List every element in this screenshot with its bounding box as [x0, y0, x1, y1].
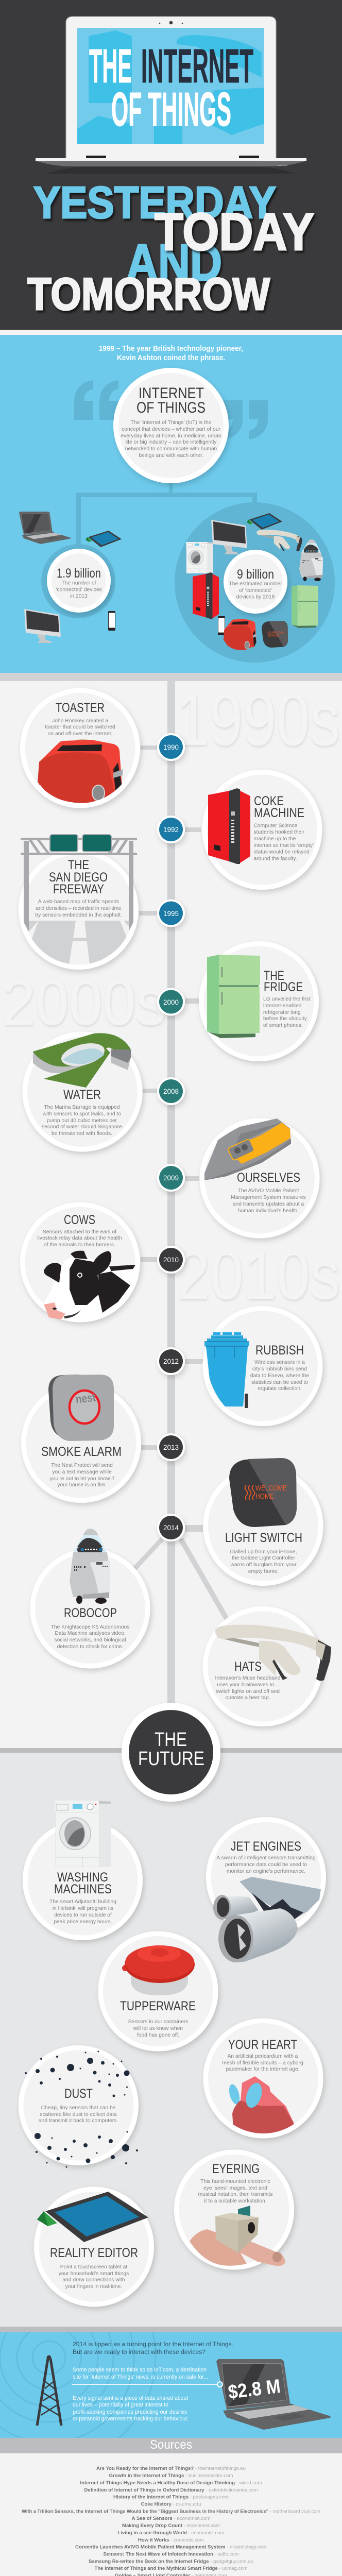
title: the internet of things [89, 39, 253, 136]
item: fridge: internet-enabled [263, 1003, 302, 1009]
panel: header [0, 0, 342, 330]
item: ourselves: human individual’s health. [238, 1208, 299, 1214]
item: eyering: EYERING [212, 2162, 260, 2176]
heading: yesterday today and tomorrow: TOMORROW [27, 268, 270, 319]
year: 2014: 2014 [163, 1524, 179, 1532]
icon: vending machine [193, 572, 219, 619]
source list: The Internet of Things and the Mythical Smart Fridge - uxmag.com [95, 2566, 248, 2571]
item: smoke alarm: The Nest Protect will send [51, 1463, 113, 1468]
icon: monitor small [24, 609, 61, 643]
decade label: 2000s: 2000s [2, 967, 166, 1039]
icon: headband [256, 530, 302, 551]
heading: the future: FUTURE [138, 1748, 204, 1770]
icon: marina barrage [33, 1033, 131, 1088]
item: smoke alarm: your house is on fire. [57, 1482, 107, 1488]
item: fridge: refrigerator long [263, 1010, 301, 1015]
item: eyering: musical notation, then transmits [198, 2192, 272, 2197]
icon: nest alarm: nest [75, 1391, 96, 1406]
item: eyering [174, 2149, 294, 2270]
text: for sale [73, 2367, 208, 2380]
item: smoke alarm: SMOKE ALARM [41, 1445, 122, 1459]
item: rubbish: Wireless sensors in a [254, 1360, 305, 1365]
definition circle: everyday lives at home, in medicine, urban [121, 433, 221, 439]
source list: Samsung Re-writes the Book on the Internet Fridge - gadgetguy.com.au [89, 2558, 253, 2564]
icon: heart [229, 2076, 294, 2133]
year: 1992: 1992 [163, 826, 179, 834]
item: hats [203, 1606, 331, 1726]
heading: the future [122, 1703, 220, 1802]
year: 1992 [157, 816, 185, 843]
source list: History of the Internet of Things - postscapes.com [113, 2495, 229, 2500]
item: dust: DUST [64, 2087, 93, 2101]
item: reality editor: and draw connections with [62, 2277, 125, 2283]
stat: 9 billion: The estimated number [229, 581, 282, 587]
item: tupperware [98, 1931, 218, 2052]
title: the internet of things: THE [89, 39, 132, 93]
stat: 9 billion: 9 billion [237, 567, 274, 582]
item: ourselves: OURSELVES [237, 1171, 300, 1185]
item: reality editor [34, 2187, 154, 2307]
item: washing machines: MACHINES [54, 1883, 112, 1896]
item: your heart: mesh of flexible circuits – a cyborg [222, 2060, 303, 2066]
item: dust [19, 2045, 139, 2168]
heading: yesterday today and tomorrow: YESTERDAY [33, 178, 276, 228]
item: san diego freeway: THE [68, 858, 89, 872]
item: ourselves [185, 1118, 319, 1239]
item: toaster: toaster that could be switched [45, 724, 115, 730]
icon: phone [218, 616, 225, 635]
stat: 9 billion [224, 550, 287, 614]
heading: sources: Sources [150, 2438, 192, 2452]
icon: vending machine [208, 788, 250, 864]
source list [22, 2466, 320, 2576]
panel: what is the internet of things [0, 330, 342, 673]
item: san diego freeway [19, 835, 157, 970]
icon: light switch [262, 621, 288, 648]
item: coke machine: internet so that its ‘empty’ [253, 843, 314, 849]
year: 1995: 1995 [163, 910, 179, 918]
item: eyering: eye ‘sees’ images, text and [203, 2185, 267, 2191]
intro text: Kevin Ashton coined the phrase. [117, 353, 225, 362]
definition circle [113, 368, 229, 483]
item: reality editor: your fingers in real-time. [65, 2284, 122, 2290]
source list: Definition of Internet of Things in Oxford Dictionary - oxforddictionaries.com [84, 2487, 258, 2493]
item: light switch: Dialled up from your iPhone, [230, 1549, 297, 1555]
icon: washing machine [55, 1801, 111, 1867]
item: eyering: it to a suitable workstation. [204, 2198, 267, 2204]
item: robocop [30, 1529, 150, 1668]
item: washing machines: peak price energy hours. [54, 1919, 112, 1925]
icon: quotation marks [74, 380, 268, 439]
intro text [99, 344, 243, 362]
item: your heart: An artificial pericardium with a [228, 2054, 298, 2059]
item: cows: Sensors attached to the ears of [43, 1229, 116, 1235]
item: fridge: before the ubiquity [263, 1016, 307, 1022]
definition circle: The ‘Internet of Things’ (IoT) is the [131, 420, 212, 426]
item: water: The Marina Barrage is equipped [44, 1105, 120, 1110]
item: coke machine: machine up to the [253, 836, 296, 842]
signal rings [0, 2332, 157, 2438]
definition circle: INTERNET [139, 385, 204, 402]
icon: gantry [21, 835, 137, 931]
item: tupperware: TUPPERWARE [120, 1999, 196, 2013]
item: smoke alarm: you’re out to let you know if [50, 1476, 114, 1482]
text: data warning: our lives – potentially of great interest to [73, 2402, 168, 2408]
icon: monitor [211, 520, 247, 554]
item: washing machines: WASHING [57, 1871, 108, 1885]
item: cows [20, 1202, 157, 1322]
item: cows: livestock relay data about the health [37, 1235, 122, 1241]
item: water: pump out 40 cubic metres per [47, 1118, 117, 1124]
text: turning point [73, 2342, 233, 2355]
item: smoke alarm: you a text message while [52, 1469, 112, 1475]
item: san diego freeway: FREEWAY [53, 883, 104, 896]
year: 2008: 2008 [163, 1088, 179, 1095]
item: light switch: warns off burglars from your [230, 1562, 297, 1568]
item: robocop: detection to check for crime. [57, 1644, 123, 1650]
icon: cow [44, 1251, 135, 1320]
item: rubbish: statistics can be used to [251, 1380, 308, 1385]
icon: tub [122, 1945, 195, 1995]
item: coke machine: COKE [254, 794, 284, 808]
group: 2013 devices [19, 512, 122, 643]
source list: A Sea of Sensors - economist.com [132, 2516, 211, 2521]
item: rubbish: city’s rubbish bins send [252, 1366, 307, 1372]
item: fridge [185, 941, 319, 1061]
year: 2014 [157, 1514, 185, 1541]
text: turning point: 2014 is tipped as a turning point for the Internet of Things. [73, 2342, 233, 2348]
icon: tablet [37, 2192, 148, 2242]
item: jet engines [206, 1817, 326, 1962]
icon: toaster [38, 739, 123, 803]
icon: toaster [224, 619, 256, 650]
item: rubbish [185, 1306, 322, 1426]
item: toaster: on and off over the internet. [48, 731, 112, 737]
item: light switch: the Goldee Light Controller [232, 1555, 296, 1561]
item: water: with sensors to spot leaks, and to [42, 1111, 121, 1117]
year: 1995 [157, 900, 185, 927]
year: 2008 [157, 1077, 185, 1105]
source list: Corventis Launches AVIVO Mobile Patient Management System - dicardiology.com [75, 2544, 267, 2549]
item: san diego freeway: A web-based map of traffic speeds [38, 899, 119, 905]
year: 2000: 2000 [163, 998, 179, 1006]
icon: robot [299, 539, 323, 581]
item: coke machine: status would be relayed [253, 849, 310, 855]
item: robocop: social networks, and biological [54, 1637, 126, 1643]
year: 2013: 2013 [163, 1444, 179, 1451]
icon: road [26, 921, 129, 964]
item: coke machine: MACHINE [254, 806, 304, 820]
icon: light switch [229, 1458, 297, 1527]
stat: 1.9 billion [47, 549, 111, 613]
icon: laptop with price: $2.8 M [227, 2376, 282, 2403]
item: washing machines: devices to run outside of [54, 1912, 112, 1918]
item: coke machine: students hooked their [253, 829, 305, 835]
item: washing machines: The smart Adjutantti building [49, 1899, 116, 1905]
icon: eyering on hand [190, 2206, 285, 2266]
item: hats: switch lights on and off and [216, 1689, 280, 1694]
year: 2012 [157, 1347, 185, 1375]
stat: 1.9 billion: ‘connected’ devices [56, 587, 102, 592]
item: tupperware: Sensors in our containers [128, 2019, 188, 2025]
stat: 1.9 billion: The number of [62, 580, 96, 586]
item: eyering: This hand-mounted electronic [200, 2179, 270, 2184]
item: your heart: pacemaker for the internet age. [226, 2066, 300, 2072]
text: for sale: site for ‘Internet of Things’ news, is currently on sale for... [73, 2374, 208, 2380]
item: jet engines: monitor an engine’s performance. [227, 1869, 305, 1874]
intro text: 1999 – The year British technology pioneer, [99, 344, 243, 353]
item: water: be threatened with floods. [52, 1131, 112, 1137]
text: for sale: Some people seem to think so as IoT.com, a destination [73, 2367, 207, 2373]
item: tupperware: will let us know when [133, 2026, 183, 2031]
year: 2009 [157, 1164, 185, 1192]
year: 2013 [157, 1433, 185, 1461]
definition circle: beings and with each other. [139, 453, 203, 459]
item: fridge: of smart phones. [263, 1023, 303, 1028]
text: data warning: Every signal sent is a piece of data shared about [73, 2395, 188, 2401]
item: ourselves: and transmits updates about a [233, 1201, 304, 1207]
item: jet engines: A swarm of intelligent sensors transmitting [216, 1855, 316, 1861]
item: water: WATER [63, 1088, 101, 1102]
item: water: second of water should Singapore [42, 1124, 122, 1130]
icon: fridge [207, 955, 260, 1038]
item: washing machines: in Helsinki will program its [53, 1906, 113, 1911]
item: reality editor: your household’s smart things [59, 2271, 129, 2277]
item: smoke alarm [21, 1375, 157, 1503]
icon: transmission tower [37, 2355, 61, 2426]
icon: laptop small [19, 512, 71, 544]
item: tupperware: food has gone off. [137, 2032, 179, 2038]
year: 2012: 2012 [163, 1358, 179, 1365]
source list: How it Works - corventis.com [138, 2537, 204, 2543]
item: jet engines: performance data could be used to [225, 1862, 307, 1868]
year: 2000 [157, 988, 185, 1016]
icon: robot [70, 1529, 110, 1604]
item: light switch: LIGHT SWITCH [225, 1531, 302, 1545]
stat: 1.9 billion: in 2013 [70, 594, 88, 599]
item: san diego freeway: and densities – recorded in real-time [36, 906, 122, 911]
heading: yesterday today and tomorrow: AND [126, 234, 222, 292]
panel: are we ready [0, 2327, 342, 2438]
source list: Making Every Drop Count - economist.com [122, 2523, 220, 2528]
icon: avivo patch [204, 1118, 291, 1180]
stat: 1.9 billion: 1.9 billion [57, 566, 101, 581]
panel: timeline [0, 673, 342, 1749]
item: robocop: Data Machine analyses video, [55, 1631, 126, 1636]
item: coke machine: around the faculty. [253, 856, 297, 861]
item: rubbish: regulate collection. [258, 1386, 302, 1392]
text: data warning: or paranoid governments tracking our behaviour. [73, 2416, 189, 2422]
item: toaster [20, 688, 157, 808]
source list: Growth in the Internet of Things - businessinsider.com [109, 2473, 233, 2478]
text: data warning: profit-seeking companies predicting our desires [73, 2409, 187, 2415]
item: cows: of the animals to their farmers. [44, 1242, 115, 1248]
item: light switch: empty home. [248, 1569, 279, 1574]
connector lines [76, 483, 257, 547]
item: san diego freeway: SAN DIEGO [49, 871, 108, 885]
source list: With a Trillion Sensors, the Internet of Things Would be the "Biggest Business in the History of Electronics" - motherboard.vice.com [22, 2509, 320, 2514]
icon: bin [204, 1332, 249, 1408]
heading: yesterday today and tomorrow [27, 178, 314, 319]
item: rubbish: data to Enevo, where the [250, 1373, 310, 1379]
panel: sources [0, 2438, 342, 2576]
item: hats: operate a beer tap. [225, 1695, 270, 1701]
source list: Coke History - cs.cmu.edu [141, 2502, 201, 2507]
icon: tablet [247, 513, 282, 530]
icon: jet engines [213, 1877, 321, 1962]
item: coke machine [185, 770, 322, 890]
item: dust: and transmit it back to computers. [39, 2118, 118, 2124]
year: 2010: 2010 [163, 1256, 179, 1264]
text: turning point: But are we ready to interact with these devices? [73, 2349, 206, 2355]
source list: Are You Ready for the Internet of Things? - theinternetofthings.eu [96, 2466, 246, 2471]
item: cows: COWS [64, 1213, 95, 1227]
definition circle: OF THINGS [136, 399, 206, 416]
pointer line [72, 2382, 223, 2387]
item: toaster: John Romkey created a [52, 718, 108, 724]
item: dust: scattered like dust to collect data [40, 2112, 117, 2117]
source list: Sensors: The Next Wave of Infotech Innovation - saffo.com [104, 2551, 239, 2556]
icon: nest alarm [48, 1375, 114, 1441]
year: 1990: 1990 [163, 743, 179, 751]
item: fridge: LG unveiled the first [263, 996, 311, 1002]
heading: the future: THE [155, 1729, 187, 1751]
source list: Internet of Things Hype Needs a Healthy Dose of Design Thinking - wired.com [80, 2480, 262, 2485]
item: reality editor: REALITY EDITOR [50, 2246, 138, 2260]
item: hats: Interaxon’s Muse headband [215, 1675, 281, 1681]
heading: yesterday today and tomorrow: TODAY [155, 202, 314, 261]
definition circle: networked to communicate with human [125, 446, 217, 452]
icon: laptop with price [216, 2359, 331, 2430]
item: fridge: THE [264, 969, 284, 983]
icon: headband [215, 1625, 331, 1681]
year: 2010 [157, 1246, 185, 1274]
item: ourselves: Management System measures [231, 1195, 306, 1200]
year: 2009: 2009 [163, 1174, 179, 1182]
item: robocop: The Knightscope K5 Autonomous [51, 1624, 129, 1630]
item: reality editor: Point a touchscreen tablet at [60, 2264, 127, 2270]
stat: 9 billion: devices by 2018 [236, 595, 275, 600]
item: your heart [203, 2019, 323, 2143]
icon: dust particles [25, 2050, 138, 2168]
stat: 9 billion: of ‘connected’ [239, 588, 272, 594]
item: dust: Cheap, tiny sensors that can be [41, 2105, 116, 2111]
item: washing machines [23, 1801, 143, 1940]
panel: the future [0, 1703, 342, 2327]
item: your heart: YOUR HEART [228, 2038, 297, 2052]
year: 1990 [157, 733, 185, 761]
item: jet engines: JET ENGINES [231, 1840, 301, 1854]
text: data warning [73, 2395, 189, 2422]
icon: tablet small [86, 531, 122, 547]
item: water [23, 1031, 157, 1152]
item: fridge: FRIDGE [264, 980, 303, 994]
item: hats: uses your brainwaves to... [217, 1682, 279, 1688]
item: hats: HATS [234, 1660, 262, 1674]
icon: washing machine small [186, 542, 213, 573]
item: robocop: ROBOCOP [64, 1606, 117, 1620]
diagonal connectors [135, 1539, 227, 1620]
item: light switch [185, 1458, 323, 1586]
icon: laptop with title [36, 16, 306, 174]
group: 2018 devices [175, 502, 335, 663]
item: san diego freeway: by sensors embedded in the asphalt. [35, 912, 122, 918]
icon: fridge [292, 585, 318, 628]
icon: phone small [108, 611, 115, 631]
definition circle: life or big industry – can be intelligently [126, 439, 217, 445]
item: ourselves: The AVIVO Mobile Patient [238, 1188, 299, 1194]
item: toaster: TOASTER [56, 701, 105, 715]
source list: Living in a see-through World - economist.com [117, 2530, 225, 2535]
definition circle: concept that devices – whether part of our [122, 427, 220, 432]
item: rubbish: RUBBISH [255, 1344, 304, 1358]
timeline axis [167, 681, 175, 1704]
item: coke machine: Computer Science [253, 823, 297, 828]
